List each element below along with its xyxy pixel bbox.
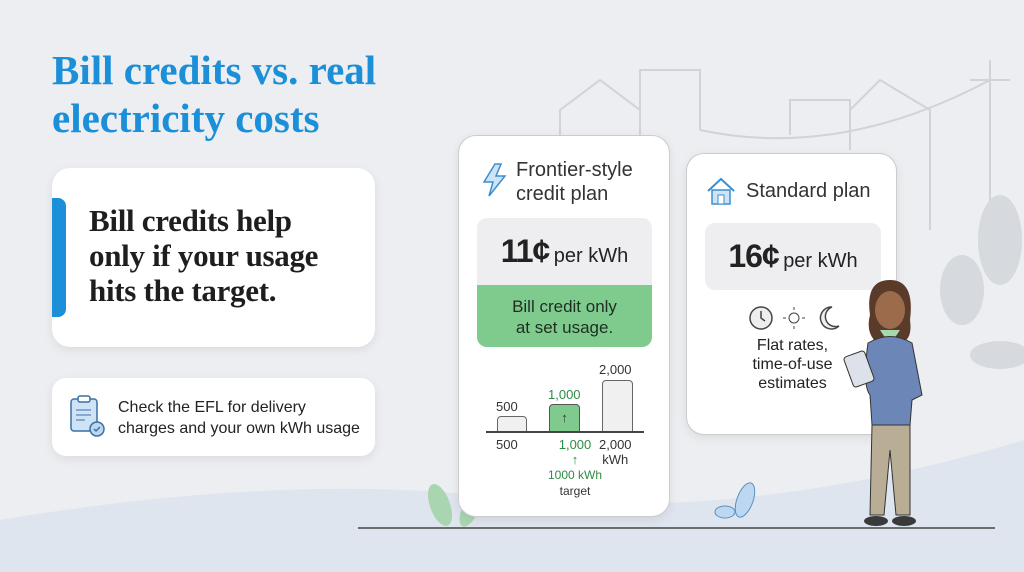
panel: standard plan [686,153,897,435]
panel: tip [52,378,375,456]
tip text [118,399,360,437]
panel: key message [52,168,375,347]
bar chart: 500 [496,399,518,414]
description: estimates [758,375,827,392]
bar chart [486,362,644,498]
credit note: at set usage. [516,318,613,337]
bar chart: 1,000 [559,437,591,452]
icon: clipboard [70,395,105,437]
illustration: woman with tablet [844,280,922,526]
credit note: Bill credit only [512,297,617,316]
title [52,47,376,141]
price box: 16¢ per kWh [728,238,858,274]
tip text: Check the EFL for delivery [118,399,306,416]
bar chart: ↑ [561,410,568,425]
tip text: charges and your own kWh usage [118,420,360,437]
panel: frontier plan [458,135,670,517]
message text [89,203,318,308]
bar chart: 1000 kWh [548,468,602,482]
price box [477,218,652,285]
bar chart: kWh [602,452,628,467]
icon: lightning [482,163,506,196]
bar chart: 1,000 [548,387,581,402]
credit note [477,285,652,347]
plan title: Frontier-style [516,159,633,181]
bar chart: target [560,484,590,498]
description [752,337,833,392]
accent bar [52,198,66,317]
message text: only if your usage [89,238,318,273]
bar chart: 2,000 [599,362,632,377]
icon: house [707,178,735,205]
description: time-of-use [752,356,833,373]
plan title: Standard plan [746,180,871,202]
price box: 11¢ per kWh [501,233,628,269]
bar chart: ↑ [572,452,578,467]
bar chart: 2,000 [599,437,632,452]
bar chart: 500 [496,437,518,452]
plan title [516,159,633,205]
plan title: credit plan [516,183,608,205]
message text: Bill credits help [89,203,292,238]
title: electricity costs [52,95,319,141]
icons: clock sun moon [749,306,840,330]
title: Bill credits vs. real [52,47,376,93]
price box [705,223,881,290]
description: Flat rates, [757,337,828,354]
message text: hits the target. [89,273,276,308]
